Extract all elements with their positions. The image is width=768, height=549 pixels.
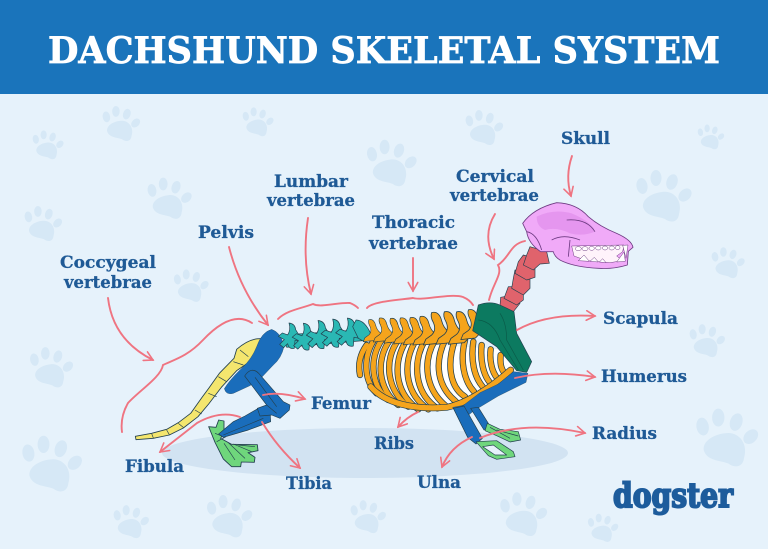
thoracic vertebrae [363, 309, 487, 345]
label: pelvis: Pelvis [198, 223, 254, 243]
label: cervical vertebrae: vertebrae [449, 186, 539, 206]
label: fibula: Fibula [125, 457, 184, 477]
arrow: coccygeal vertebrae [108, 298, 153, 360]
coccygeal vertebrae tail [135, 339, 261, 440]
front feet [476, 423, 521, 459]
label: coccygeal vertebrae: Coccygeal [60, 253, 157, 273]
lumbar vertebrae [278, 318, 371, 350]
arrow: thoracic vertebrae [412, 258, 414, 291]
pelvis [224, 329, 284, 394]
brace: lumbar vertebrae [278, 303, 358, 319]
label: cervical vertebrae [449, 167, 539, 206]
tibia and fibula [219, 408, 271, 437]
skeleton: tail and hind section [135, 318, 371, 467]
label: cervical vertebrae: Cervical [456, 167, 535, 187]
rib cage [359, 340, 513, 410]
label: coccygeal vertebrae: vertebrae [63, 273, 152, 293]
title: DACHSHUND SKELETAL SYSTEM [48, 30, 720, 72]
label: skull: Skull [561, 129, 611, 149]
label: thoracic vertebrae: Thoracic [372, 213, 455, 233]
label: femur: Femur [311, 394, 372, 414]
brace: thoracic vertebrae [367, 296, 473, 308]
radius and ulna [453, 406, 490, 444]
label: tibia: Tibia [286, 474, 332, 494]
humerus [453, 372, 528, 418]
arrow: lumbar vertebrae [306, 218, 311, 294]
brace: coccygeal vertebrae [122, 319, 252, 432]
label: thoracic vertebrae: vertebrae [368, 234, 458, 254]
arrow: pelvis [229, 247, 268, 325]
femur [245, 370, 290, 418]
label: ulna: Ulna [417, 473, 461, 493]
arrow: ulna [442, 437, 472, 467]
arrow: fibula [160, 415, 240, 452]
background paw prints [21, 106, 761, 542]
brace: cervical vertebrae [489, 241, 525, 300]
label: lumbar vertebrae: Lumbar [274, 172, 349, 192]
ground shadow [162, 428, 568, 478]
label: scapula: Scapula [603, 309, 678, 329]
label: coccygeal vertebrae [60, 253, 157, 293]
label: ribs: Ribs [374, 434, 414, 454]
arrow: ribs [398, 412, 418, 427]
logo: dogster: dogster [613, 476, 734, 516]
arrow: cervical vertebrae [488, 214, 495, 259]
scapula [473, 303, 532, 372]
header banner [0, 0, 768, 94]
skull [523, 203, 633, 269]
arrow: radius [480, 428, 585, 438]
arrow: femur [263, 394, 305, 399]
arrow: scapula [517, 316, 595, 330]
arrow: tibia [262, 422, 300, 468]
arrow: humerus [515, 374, 595, 378]
skeleton: thorax, neck, skull, foreleg [359, 203, 633, 459]
label: thoracic vertebrae [368, 213, 458, 254]
cervical vertebrae [500, 247, 549, 312]
label: lumbar vertebrae: vertebrae [266, 191, 355, 211]
hind foot [209, 420, 258, 467]
arrow: skull [568, 156, 572, 196]
label: humerus: Humerus [601, 367, 687, 387]
label: lumbar vertebrae [266, 172, 355, 211]
label: radius: Radius [592, 424, 657, 444]
